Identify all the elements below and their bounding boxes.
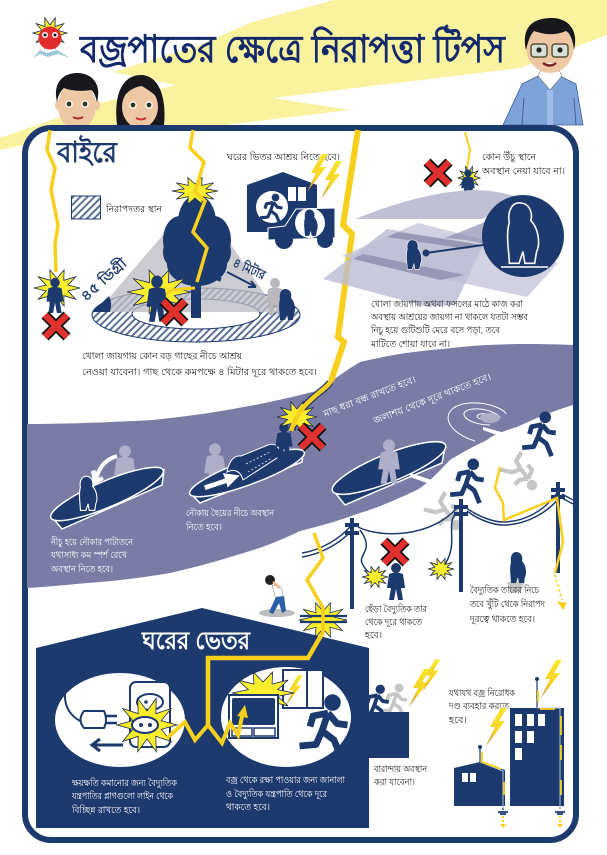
main lightning bolt bbox=[331, 130, 358, 381]
45 degree label: ৪৫ ডিগ্রী bbox=[77, 253, 130, 304]
crouching figure bbox=[79, 476, 97, 510]
small building bbox=[454, 762, 505, 806]
main frame panel bbox=[25, 128, 576, 840]
text: away from windows bbox=[225, 775, 346, 813]
window with bolt bbox=[283, 670, 307, 708]
gray standing figure bbox=[114, 445, 136, 490]
safe ring bbox=[92, 288, 300, 342]
text: tree advice: খোলা জায়গায় কোন বড় গাছের নীচে আশ্রয় bbox=[82, 349, 243, 362]
text: boat 1: অবস্থান নিতে হবে। bbox=[50, 563, 113, 575]
ground symbols bbox=[498, 812, 565, 814]
text: tree advice bbox=[82, 349, 317, 378]
transformer flash and bolt bbox=[299, 533, 347, 658]
legend: safer zone: নিরাপদতর স্থান bbox=[105, 203, 163, 215]
running figures with shadows bbox=[422, 412, 556, 536]
house section bbox=[36, 608, 369, 828]
shadow under crouched person bbox=[507, 582, 525, 592]
house wire bbox=[208, 632, 323, 727]
text: away from windows: থাকতে হবে। bbox=[226, 802, 270, 813]
heading: inside: ঘরের ভেতর bbox=[141, 627, 251, 655]
text: under power line: দূরত্বে থাকতে হবে। bbox=[469, 614, 535, 625]
text: boat 1: নীচু হয়ে নৌকার পাটাতনে bbox=[50, 535, 134, 548]
text: high ground: কোন উঁচু স্থানে bbox=[482, 150, 537, 163]
ground dashes bbox=[503, 816, 560, 824]
text: balcony: করা যাবেনা। bbox=[373, 777, 415, 788]
text: broken wire: হবে। bbox=[364, 630, 382, 641]
text: unplug: ক্ষয়ক্ষতি কমানোর জন্য বৈদ্যুতিক bbox=[71, 777, 178, 789]
tree bbox=[163, 195, 231, 318]
hull bbox=[190, 450, 303, 503]
water ripples bbox=[448, 403, 506, 441]
person near broken wire bbox=[387, 563, 405, 600]
text: boat 1 bbox=[50, 535, 134, 575]
text: lightning rod: দণ্ড ব্যবহার করতে bbox=[448, 701, 510, 712]
diagram: tree and safe ring bbox=[77, 130, 300, 342]
legend: safer zone bbox=[72, 196, 163, 219]
curved lightning strike on boat bbox=[292, 382, 330, 430]
text: tree advice: নেওয়া যাবেনা। গাছ থেকে কমপক্ষে ৪ মিটার দূরে থাকতে হবে। bbox=[82, 365, 317, 378]
safe cone triangle bbox=[97, 195, 277, 312]
text: field advice: মাটিতে শোয়া যাবে না। bbox=[370, 337, 450, 350]
text: broken wire: ছেঁড়া বৈদ্যুতিক তার bbox=[365, 602, 428, 615]
text: lightning rod: হবে। bbox=[448, 715, 467, 726]
heading: outside: বাইরে bbox=[56, 135, 118, 169]
river band bbox=[27, 344, 573, 588]
text: boat 2: নিতে হবে। bbox=[185, 521, 222, 533]
text: stop fishing: মাছ ধরা বন্ধ রাখতে হবে। bbox=[321, 374, 418, 420]
left arrow bbox=[92, 739, 123, 751]
cross: high ground bbox=[427, 162, 449, 184]
angle marker bbox=[92, 296, 111, 312]
text: away from windows: বজ্র থেকে রক্ষা পাওয়ার জন্য জানালা bbox=[225, 775, 346, 786]
boat 2 group bbox=[186, 423, 308, 505]
text: field advice bbox=[370, 297, 529, 350]
text: boat 2: নৌকায় ছৈয়ের নীচে অবস্থান bbox=[186, 506, 275, 519]
text: boat 1: যথাসাধ্য কম স্পর্শ রেখে bbox=[50, 549, 128, 561]
character: man with glasses bbox=[503, 18, 583, 125]
shadow of figure in water bbox=[480, 413, 500, 423]
hull bbox=[52, 470, 164, 529]
person on hill struck bbox=[458, 132, 480, 197]
pole 1 bbox=[345, 518, 359, 609]
dashed ground arrow bbox=[555, 575, 567, 610]
zigzag surge line bbox=[167, 712, 243, 743]
background yellow light beams bbox=[0, 0, 607, 150]
buildings with lightning rods bbox=[454, 660, 565, 828]
flash at person under tree bbox=[127, 270, 191, 314]
gray safe person bbox=[266, 278, 284, 315]
gray standing figure bbox=[204, 443, 226, 488]
plug bbox=[65, 686, 82, 722]
boat deck bbox=[46, 458, 168, 530]
boat 3 bbox=[327, 432, 451, 505]
person struck in open bbox=[34, 270, 80, 313]
title: বজ্রপাতের ক্ষেত্রে নিরাপত্তা টিপস bbox=[78, 24, 507, 71]
fields bbox=[323, 222, 558, 307]
4 metre arrow bbox=[227, 272, 256, 287]
white arrow into canopy bbox=[205, 474, 238, 489]
text: under power line: তবে খুঁটি থেকে নিরাপদ bbox=[469, 597, 546, 610]
text: lightning rod: যথাযথ বজ্র নিরোধক bbox=[448, 687, 516, 699]
crouched safe person bbox=[279, 289, 295, 320]
right white circle bbox=[221, 667, 351, 767]
bolts bbox=[541, 660, 562, 698]
text: boat 2 bbox=[185, 506, 275, 533]
text: unplug: যন্ত্রপাতির প্লাগগুলো লাইন থেকে bbox=[71, 790, 174, 802]
socket flash bbox=[117, 698, 177, 752]
tv flash bbox=[232, 672, 294, 714]
balcony icon bbox=[362, 659, 440, 758]
text: under power line bbox=[469, 584, 546, 625]
pole 2 bbox=[454, 499, 468, 592]
wires bbox=[302, 493, 573, 557]
lightning on power line bbox=[495, 467, 563, 573]
callout circle: crouched figure bbox=[482, 195, 564, 277]
crouched person near pole bbox=[510, 552, 526, 583]
lightning to standing person bbox=[47, 130, 58, 272]
hanging wires bbox=[360, 513, 456, 577]
text: balcony: বারান্দায় অবস্থান bbox=[373, 764, 428, 775]
4 metre label: ৪ মিটার bbox=[231, 254, 269, 283]
curved lightning bolt bbox=[291, 381, 331, 431]
scared child walking bbox=[259, 575, 295, 617]
callout line bbox=[422, 244, 490, 256]
person on boat bbox=[275, 423, 293, 458]
text: shelter advice: ঘরের ভিতর আশ্রয় নিতে হবে। bbox=[226, 151, 340, 163]
text: field advice: খোলা জায়গায় অথবা ফসলের মাঠে কাজ করা bbox=[371, 297, 524, 310]
white boat debris bbox=[483, 427, 516, 439]
icon: house and car shelter bbox=[247, 154, 342, 249]
running person bbox=[300, 695, 348, 758]
character: boy bbox=[55, 73, 100, 130]
text: stay away from water: জলাশয় থেকে দূরে থাকতে হবে। bbox=[371, 372, 493, 427]
white curved arrow bbox=[93, 456, 117, 482]
wire sparks bbox=[362, 559, 454, 587]
text: high ground: অবস্থান নেয়া যাবে না। bbox=[481, 166, 565, 177]
text: unplug: বিচ্ছিন্ন রাখতে হবে। bbox=[71, 804, 140, 816]
hill bbox=[355, 190, 517, 219]
logo: sun mascot bbox=[33, 18, 70, 58]
tree top flash bbox=[172, 178, 218, 204]
house shape bbox=[36, 608, 369, 828]
boat 1 group bbox=[46, 445, 168, 530]
pole 3 bbox=[551, 482, 565, 573]
television bbox=[229, 695, 278, 738]
flash on boat person bbox=[277, 402, 317, 432]
power lines and poles bbox=[302, 482, 573, 609]
text: broken wire bbox=[364, 602, 428, 641]
lightning rods bbox=[480, 679, 560, 810]
cross: person in open bbox=[45, 315, 67, 337]
cross: broken wire bbox=[384, 541, 406, 563]
text: away from windows: ও বৈদ্যুতিক যন্ত্রপাতি থেকে দূরে bbox=[226, 788, 328, 800]
crouching figure in field bbox=[406, 240, 422, 269]
text: lightning rod bbox=[448, 687, 516, 726]
boat deck bbox=[186, 441, 308, 505]
text: unplug bbox=[71, 777, 178, 816]
left white circle bbox=[55, 673, 185, 767]
text: broken wire: থেকে দূরে থাকতে bbox=[365, 617, 423, 628]
plug socket bbox=[130, 682, 170, 747]
text: high ground bbox=[481, 150, 565, 177]
text: field advice: নিচু হয়ে গুটিশুটি মেরে বসে পড়া, তবে bbox=[370, 323, 501, 336]
character: girl bbox=[116, 75, 164, 128]
cross under tree bbox=[163, 301, 185, 323]
text: field advice: অবস্থায় আশ্রয়ের জায়গা না থাকলে যতটা সম্ভব bbox=[370, 310, 529, 323]
cross: boat fishing bbox=[301, 426, 323, 448]
text: under power line: বৈদ্যুতিক তারের নিচে bbox=[470, 584, 540, 596]
lightning on tree bbox=[190, 130, 207, 282]
text: balcony bbox=[373, 764, 428, 788]
tall building bbox=[510, 708, 564, 806]
boat canopy bbox=[227, 444, 280, 480]
person under tree bbox=[147, 276, 167, 322]
